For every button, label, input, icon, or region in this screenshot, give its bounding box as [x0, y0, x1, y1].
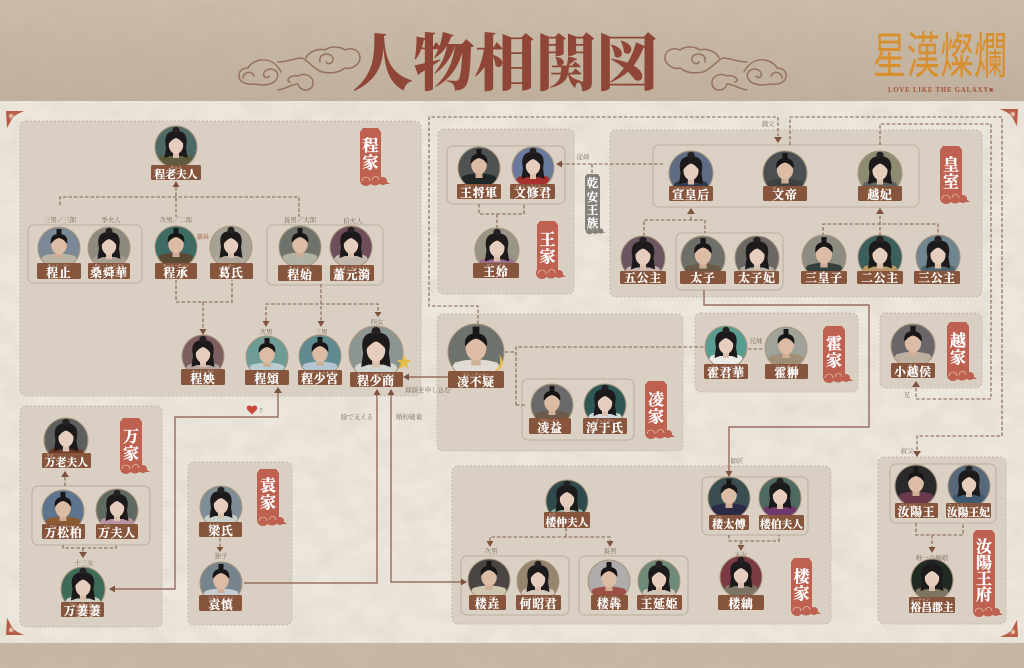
connector: 程老夫人 children: 次男／二郎: [160, 215, 193, 224]
person: 程姎: チョン・ヤン: [192, 369, 215, 374]
panel: 楼家: [452, 466, 831, 624]
connector: 程始 children: 三男: [314, 327, 328, 336]
arrow: 袁慎 程少商: 陰で支える: [341, 412, 373, 421]
person: 楼犇: 楼犇: [597, 597, 622, 611]
person: 楼垚: [465, 559, 513, 611]
person: 万萋萋: ワン・チーチー: [70, 602, 96, 607]
connector: 程老夫人 children: 離縁: [197, 233, 209, 241]
family tab: 凌家: 家: [648, 407, 664, 426]
connector: 王家: [479, 204, 524, 229]
panel: 王家: [438, 129, 574, 294]
person: 越妃: ユエ: [871, 187, 879, 191]
person: 越妃: 越妃: [867, 188, 893, 202]
corner ornament top right: [1000, 109, 1018, 126]
person: 王将軍: 王将軍: [460, 186, 498, 200]
couple box: 太子 太子妃: [676, 233, 783, 290]
connector: 越妃 小越侯: 兄: [904, 391, 911, 399]
person: 文帝: 文帝: [772, 188, 798, 202]
family tab: 霍家: 霍: [826, 334, 842, 353]
panel: 霍家: [695, 313, 858, 392]
person: 楼仲夫人: [544, 480, 590, 529]
family tab: 汝陽王府: 王: [976, 570, 992, 588]
person: 凌益: 凌益: [537, 421, 563, 435]
couple box: 汝陽王 汝陽王妃: [890, 464, 996, 523]
person: 楼伯夫人: [757, 477, 804, 531]
family tab: 霍家: [823, 326, 853, 383]
connector: 程承 葛氏 to 程姎: [176, 280, 232, 335]
person: 汝陽王: [894, 464, 938, 518]
connector: 文帝 汝陽王: 叔父: [900, 446, 914, 455]
family tab: 王家: 王: [539, 231, 556, 249]
person: 王延姫: 王延姫: [641, 597, 678, 611]
family tab: 乾安王族: 乾: [587, 176, 599, 190]
connector: 汝陽王 children: [916, 523, 963, 562]
person: 裕昌郡主: 裕昌郡主: [910, 600, 954, 614]
person: 楼縭: ロウ・リー: [732, 596, 751, 600]
connector: 楼仲夫人 children: 長男: [604, 546, 616, 555]
arrow: 程少商 楼垚: 婚約破棄: [396, 412, 422, 421]
arrow: 太子 楼太傅: [704, 290, 869, 477]
arrow: 程頌 万萋萋: [109, 387, 282, 592]
family tab: 越家: 越: [950, 331, 966, 350]
person: 王延姫: ワン・イェンジー: [644, 595, 674, 600]
family tab: 程家: 程: [362, 137, 379, 155]
person: 文帝: [762, 150, 808, 201]
person: 袁慎: 袁慎: [208, 598, 234, 612]
person: 楼犇: [585, 560, 633, 611]
person: 宣皇后: [667, 151, 715, 202]
person: 万夫人: [94, 489, 140, 540]
person: 太子妃: [733, 236, 781, 285]
person: 楼縭: 楼縭: [728, 597, 754, 611]
person: 楼太傅: [708, 476, 750, 530]
person: 蕭元漪: 蕭元漪: [333, 268, 371, 282]
person: 五公主: [619, 236, 667, 285]
person: 万老夫人: [42, 418, 91, 469]
person: 程老夫人: [151, 126, 201, 181]
family tab: 万家: 家: [123, 444, 139, 463]
person: 王延姫: [636, 560, 682, 611]
person: 楼太傅: ロウ: [714, 516, 722, 520]
person: 凌益: リン・イー: [541, 419, 560, 423]
couple box: 楼太傅 楼伯夫人: [702, 477, 808, 535]
person: 何昭君: ハー・ジャオジュン: [521, 595, 555, 600]
couple box: 万松柏 万夫人: [32, 486, 150, 545]
connector: 万家: [61, 471, 116, 567]
connector: 万家: 十三女: [74, 558, 94, 567]
person: 霍君華: フォ・ジュンホワ: [711, 364, 741, 369]
person: 汝陽王妃: 汝陽王妃: [947, 505, 990, 519]
person: 文修君: [510, 147, 556, 200]
connector: 汝陽王 children: 唯一の嫡娘: [916, 553, 949, 562]
person: 楼仲夫人: 楼仲夫人: [545, 515, 589, 529]
connector: 程始 children: 次男: [260, 327, 272, 336]
person: 程始: 程始: [287, 268, 313, 282]
person: 程少商: [346, 326, 411, 388]
person: 王姈: ワン・リン: [487, 264, 506, 268]
person: 程承: [154, 226, 198, 279]
family tab: 乾安王族: [585, 174, 605, 234]
couple box: 程止 桑舜華: [28, 225, 142, 283]
person: 楼伯夫人: 楼伯夫人: [760, 517, 803, 531]
arrow: 凌不疑 程少商: [403, 374, 451, 394]
arrow: 程少商 楼垚: [388, 389, 467, 586]
corner ornament bottom right: [1000, 620, 1018, 637]
person: 淳于氏: チュンユー: [596, 418, 615, 423]
connector: 凌不疑 文帝: 満父: [762, 119, 775, 128]
person: 程止: [35, 227, 83, 280]
family tab: 王家: [536, 221, 566, 279]
family tab: 程家: 家: [362, 153, 379, 172]
person: 三公主: 三公主: [918, 271, 956, 285]
person: 万萋萋: 万萋萋: [64, 604, 102, 618]
connector: 程老夫人 children: 季夫人: [101, 215, 121, 224]
connector: 程始 children: 四女: [370, 317, 384, 326]
person: 楼縭: [718, 556, 764, 611]
person: 楼犇: ロウ・ベン: [600, 596, 619, 600]
family tab: 楼家: 家: [793, 584, 810, 603]
family tab: 袁家: 家: [260, 493, 276, 512]
person: 袁慎: ユエン・シェン: [208, 596, 234, 600]
person: 二公主: 二公主: [861, 271, 899, 285]
panel: 凌家: [437, 314, 683, 451]
person: 文修君: 文修君: [514, 186, 552, 200]
person: 何昭君: 何昭君: [520, 597, 557, 611]
person: 凌不疑: 凌不疑: [457, 375, 495, 389]
corner ornament bottom left: [6, 618, 24, 635]
person: 太子: [678, 236, 728, 285]
person: 汝陽王: じょよう: [900, 503, 916, 508]
person: 霍君華: 霍君華: [707, 366, 745, 380]
family tab: 万家: 万: [123, 428, 139, 446]
person: 葛氏: 葛氏: [218, 266, 244, 280]
person: 凌益: [528, 384, 576, 435]
connector: 程老夫人 children: 長男／大郎: [284, 215, 317, 224]
couple box: 楼垚 何昭君: [461, 556, 569, 615]
arrow: 袁慎 程少商: [244, 389, 380, 583]
person: 王姈: 王姈: [483, 265, 509, 279]
person: 淳于氏: 淳于氏: [586, 421, 624, 435]
person: 程承: チョン・チョン: [163, 263, 189, 268]
family tab: 汝陽王府: [973, 530, 1003, 617]
person: 梁氏: 梁氏: [208, 524, 234, 538]
person: 万松柏: 万松柏: [45, 526, 82, 540]
connector: 宣皇后 文修君: 従姉: [576, 152, 590, 161]
connector: 袁家: 独子: [214, 551, 228, 560]
person: 三皇子: [799, 235, 849, 285]
person: 梁氏: リャン: [208, 522, 220, 527]
family tab: 越家: 家: [950, 348, 966, 367]
person: 程頌: 程頌: [254, 372, 280, 386]
person: 太子: 太子: [690, 271, 716, 285]
person: 楼太傅: 楼太傅: [712, 517, 746, 531]
arrow: 太子 楼太傅: 師匠: [730, 456, 744, 465]
connector: 凌不疑 文帝: [429, 117, 782, 324]
family tab: 乾安王族: 安: [587, 190, 599, 204]
title: 人物相関図: [352, 14, 658, 103]
person: 小越侯: ユエ: [909, 364, 917, 368]
family tab: 汝陽王府: 汝: [976, 537, 993, 556]
family tab: 皇室: 皇: [943, 155, 959, 174]
connector: 文帝 汝陽王: [790, 117, 1002, 457]
panel: 袁家: [188, 462, 292, 625]
person: 桑舜華: 桑舜華: [90, 266, 128, 280]
couple box: 楼犇 王延姫: [579, 556, 688, 615]
family tab: 程家: [360, 128, 390, 186]
person: 越妃: [856, 151, 904, 202]
panel: 程家: [20, 121, 421, 396]
decorative cloud right: [665, 47, 786, 90]
family tab: 汝陽王府: 府: [976, 585, 992, 604]
person: 楼垚: 楼垚: [475, 597, 500, 611]
person: 梁氏: [198, 486, 244, 538]
person: 袁慎: [199, 562, 242, 611]
family tab: 楼家: [791, 558, 821, 616]
person: 万老夫人: 万老夫人: [45, 455, 88, 469]
family tab: 乾安王族: 王: [587, 203, 599, 217]
person: 小越侯: [890, 324, 936, 378]
person: 汝陽王: 汝陽王: [898, 505, 935, 519]
person: 程少宮: チョン・シャオゴン: [303, 370, 337, 375]
decorative cloud left: [239, 47, 360, 90]
person: 程止: 程止: [46, 266, 72, 280]
person: 霍君華: [703, 326, 749, 380]
person: 程始: [276, 226, 324, 282]
person: 何昭君: [515, 560, 561, 611]
person: 程頌: チョン・ソン: [256, 370, 279, 375]
person: 万松柏: ワン・ソンバイ: [50, 525, 76, 529]
person: 凌不疑: [448, 324, 504, 388]
person: 太子妃: 太子妃: [738, 271, 776, 285]
person: 万萋萋: [59, 567, 107, 618]
person: 程少宮: 程少宮: [301, 372, 339, 386]
person: 程姎: [180, 335, 226, 386]
connector: 程老夫人 children: 伯夫人: [343, 216, 363, 225]
connector: 宣皇后 children: [644, 208, 705, 236]
connector: 楼仲夫人 children: [484, 528, 616, 555]
person: 王将軍: [455, 147, 503, 200]
person: 二公主: [856, 235, 904, 285]
person: 三皇子: 三皇子: [805, 271, 843, 285]
family tab: 皇室: [940, 146, 970, 204]
person: 楼垚: ロウ・ヤオ: [478, 595, 497, 600]
connector: 越妃 children: [823, 208, 938, 236]
connector: 程始 children: [260, 284, 384, 336]
panel: 万家: [20, 406, 162, 627]
logo: series title: 星漢燦爛: [873, 17, 1007, 88]
person: 程少商: 程少商: [357, 374, 395, 388]
connector: 霍 siblings: [748, 336, 765, 349]
family tab: 皇室: 室: [943, 172, 959, 191]
panel: 越家: [880, 313, 982, 388]
person: 葛氏: [208, 226, 254, 280]
family tab: 越家: [947, 322, 977, 381]
connector: 楼太傅 children: [729, 535, 779, 559]
connector: 程老夫人 children: 三男／三郎: [44, 215, 77, 224]
logo: series title: LOVE LIKE THE GALAXY■: [888, 87, 994, 94]
person: 汝陽王妃: [946, 465, 992, 519]
couple box: 程始 蕭元漪: [267, 225, 383, 285]
connector: 霍 siblings: 兄妹: [750, 336, 763, 345]
couple box: 王将軍 文修君: [447, 146, 565, 204]
person: 文修君: ぶんしゅうくん: [515, 184, 541, 189]
person: 程少宮: [296, 335, 344, 386]
person: 程頌: [243, 336, 291, 386]
person: 程少商: チョン・シャオシャン: [357, 372, 395, 377]
person: 桑舜華: サン・シュンホワ: [94, 263, 124, 268]
person: 宣皇后: シュエン: [674, 187, 690, 191]
person: 霍翀: フォ・チョン: [776, 364, 798, 369]
family tab: 凌家: [645, 381, 675, 439]
corner ornament top left: [6, 111, 24, 128]
family tab: 楼家: 楼: [793, 567, 810, 586]
person: 裕昌郡主: ユーチャン: [911, 597, 930, 602]
person: 裕昌郡主: [909, 559, 955, 614]
family tab: 乾安王族: 族: [587, 216, 599, 230]
connector: 凌不疑 凌家 霍家: [505, 347, 704, 405]
person: 宣皇后: 宣皇后: [672, 188, 710, 202]
person: 王将軍: ワン: [464, 185, 472, 189]
person: 蕭元漪: シャオ・ユエンイー: [335, 265, 369, 270]
group box: 皇帝と妃: [653, 145, 919, 207]
family tab: 王家: 家: [539, 247, 556, 266]
arrow: 程頌 万萋萋: ?: [259, 407, 263, 415]
family tab: 袁家: 袁: [260, 476, 276, 495]
family tab: 霍家: 家: [826, 351, 842, 370]
person: 程姎: 程姎: [190, 372, 216, 386]
person: 程始: チョン・シー: [289, 265, 312, 270]
person: 霍翀: 霍翀: [774, 366, 800, 380]
person: 三公主: [914, 235, 962, 285]
couple box: 凌益 淳于氏: [522, 379, 634, 440]
family tab: 袁家: [257, 469, 287, 526]
person: 程止: チョン・ジー: [48, 263, 71, 268]
family tab: 凌家: 凌: [648, 390, 664, 409]
arrow: 凌不疑 程少商: 縁談を申し込む: [405, 385, 451, 394]
person: 文帝: ウェン: [772, 187, 784, 191]
person: 王姈: [473, 228, 521, 279]
connector: 楼太傅 children: 末女: [734, 550, 748, 559]
person: 楼仲夫人: ロウ: [548, 513, 556, 517]
connector: 袁家: [214, 538, 228, 560]
person: 五公主: 五公主: [624, 271, 662, 285]
person: 楼伯夫人: ロウ: [762, 516, 770, 520]
family tab: 汝陽王府: 陽: [976, 554, 992, 572]
person: 万松柏: [42, 490, 85, 539]
person: 万夫人: 万夫人: [98, 526, 136, 540]
connector: 越妃 小越侯: [880, 124, 991, 399]
panel: 汝陽王府: [878, 457, 1006, 624]
person: 程承: 程承: [163, 266, 189, 280]
person: 程老夫人: 程老夫人: [154, 167, 198, 181]
person: 汝陽王妃: じょよう: [948, 503, 964, 508]
person: 万老夫人: ワン: [46, 454, 54, 458]
person: 小越侯: 小越侯: [894, 365, 932, 379]
person: 万夫人: ワン: [103, 525, 111, 529]
person: 葛氏: ゴー: [227, 263, 235, 268]
person: 凌不疑: リン・ブーイー: [463, 372, 489, 377]
person: 淳于氏: [582, 384, 628, 435]
person: 霍翀: [764, 326, 808, 379]
connector: 楼仲夫人 children: 次男: [484, 546, 498, 555]
connector: 宣皇后 文修君: [556, 152, 663, 174]
connector: 程老夫人 children: [44, 181, 363, 241]
family tab: 万家: [120, 418, 150, 474]
person: 桑舜華: [86, 227, 132, 280]
panel: 皇室: [610, 130, 982, 297]
person: 蕭元漪: [328, 226, 374, 282]
person: 程老夫人: チョン: [170, 165, 182, 170]
